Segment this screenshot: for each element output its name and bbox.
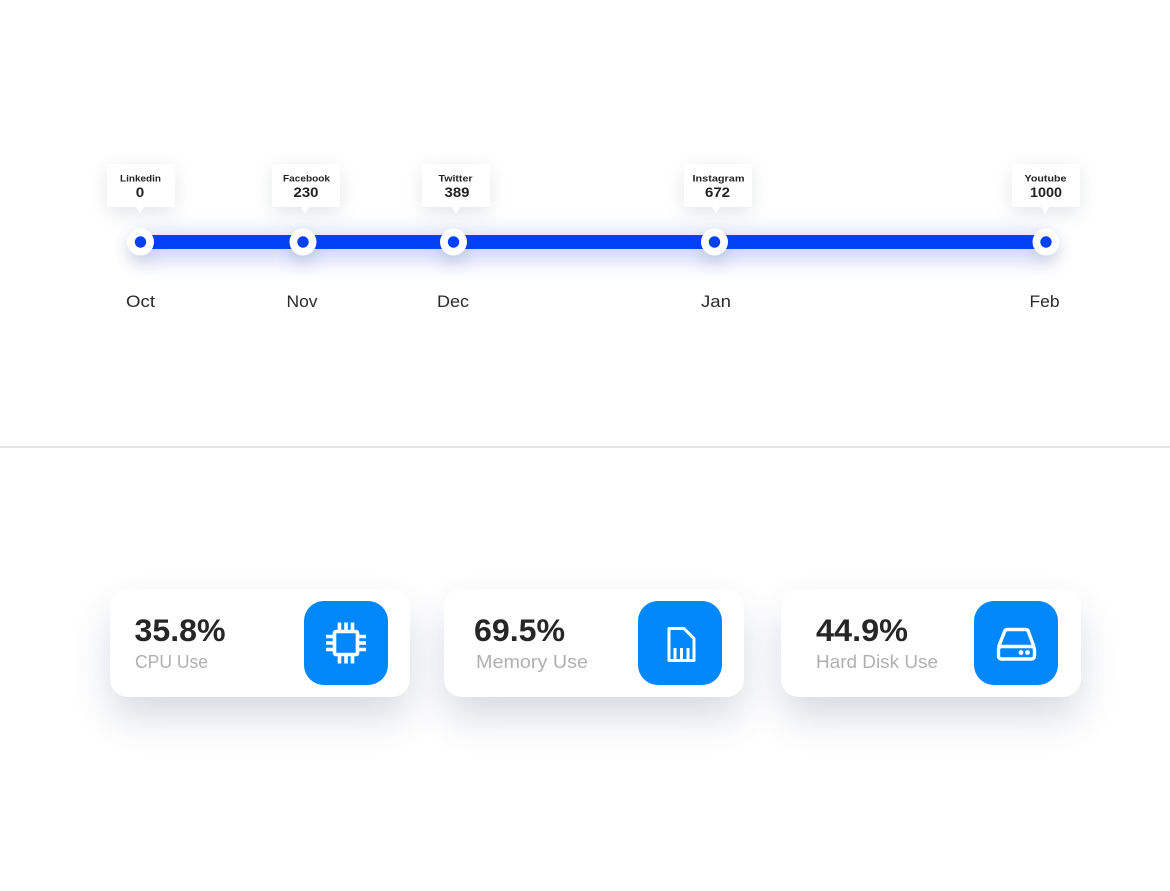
month label: Dec: Dec: [437, 292, 470, 311]
stat: 35.8%: 35.8%: [134, 612, 226, 648]
callout: Facebook 230: Facebook: [283, 174, 331, 184]
icon: memory card: [638, 601, 722, 685]
marker: Feb: [1032, 228, 1060, 264]
stat: 69.5%: 69.5%: [474, 612, 565, 648]
month label: Oct: Oct: [126, 292, 155, 311]
month label: Jan: Jan: [701, 292, 731, 311]
callout: Twitter 389: 389: [444, 185, 470, 200]
panel: Hard disk use: [781, 589, 1081, 716]
timeline chart: [107, 164, 1080, 311]
panel: Memory use: [444, 589, 744, 716]
callout: Youtube 1000: [1012, 164, 1080, 214]
marker: Nov: [289, 228, 317, 264]
callout: Twitter 389: [422, 164, 490, 214]
icon: hard drive: [974, 601, 1058, 685]
label: Memory Use: Memory Use: [476, 652, 588, 672]
callout: Youtube 1000: Youtube: [1024, 174, 1066, 184]
callout: Linkedin 0: [107, 164, 175, 214]
callout: Facebook 230: [272, 164, 340, 214]
callout: Linkedin 0: Linkedin: [120, 174, 161, 184]
callout: Instagram 672: Instagram: [692, 174, 744, 184]
callout: Instagram 672: [684, 164, 752, 214]
callout: Twitter 389: Twitter: [438, 174, 473, 184]
label: CPU Use: CPU Use: [135, 652, 208, 672]
callout: Facebook 230: 230: [294, 185, 318, 200]
panel: CPU use: [110, 589, 410, 716]
month label: Feb: Feb: [1030, 292, 1060, 311]
timeline track: [140, 235, 1046, 256]
label: Hard Disk Use: Hard Disk Use: [816, 652, 938, 672]
marker: Oct: [126, 228, 154, 264]
callout: Linkedin 0: 0: [136, 185, 144, 200]
callout: Instagram 672: 672: [705, 185, 730, 200]
marker: Jan: [700, 228, 728, 264]
marker: Dec: [440, 228, 468, 264]
month label: Nov: Nov: [286, 292, 318, 311]
callout: Youtube 1000: 1000: [1030, 185, 1062, 200]
icon: processor chip: [304, 601, 388, 685]
stat: 44.9%: 44.9%: [816, 612, 908, 648]
